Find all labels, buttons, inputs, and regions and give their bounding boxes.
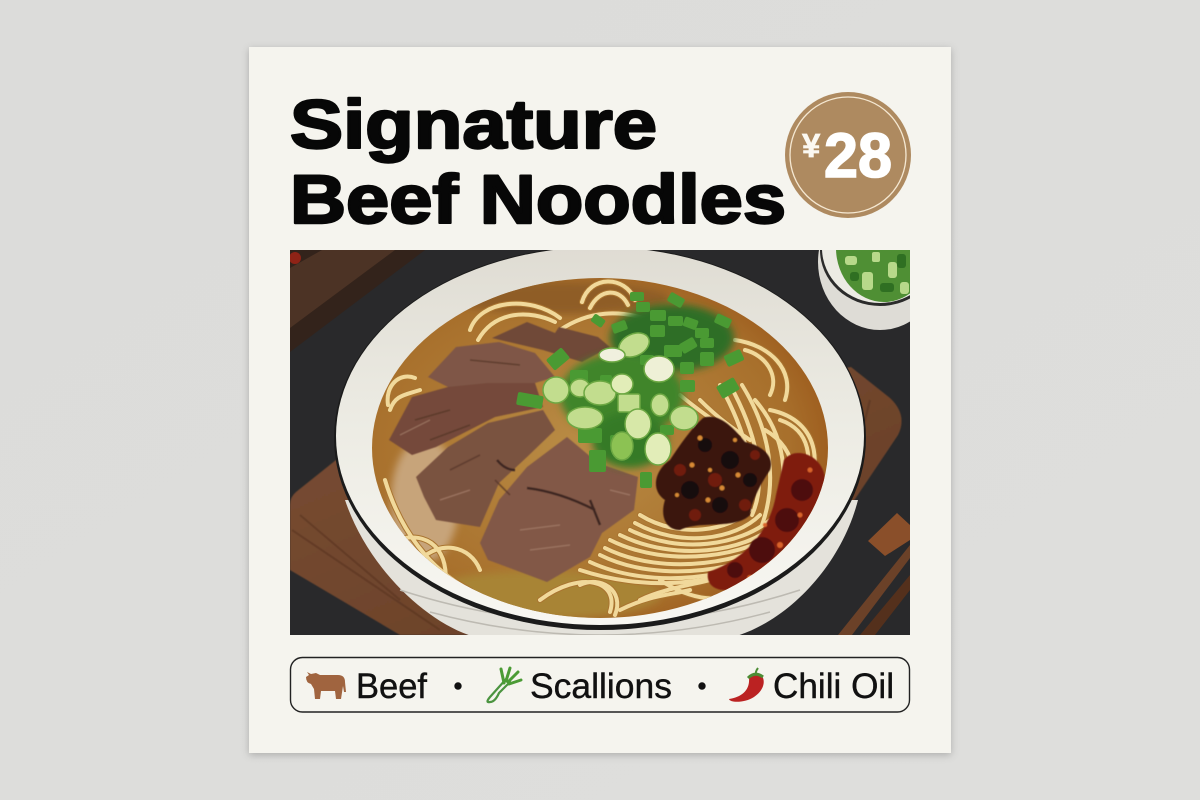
separator dot [698,682,706,690]
title: Beef Noodles [290,161,786,238]
icon: scallion [488,668,521,702]
food photo: beef noodle bowl [290,250,910,635]
wooden board [290,367,902,635]
icon: cow [306,672,346,699]
broth and noodles [378,281,825,619]
panel: menu card [249,47,951,753]
label: scallions: Scallions [530,667,672,706]
price badge [785,92,911,218]
label: chili oil: Chili Oil [773,667,894,706]
separator dot [454,682,462,690]
title [290,86,786,238]
price badge: ¥ [802,127,821,164]
wooden tray top left [289,250,425,352]
noodle bowl [334,246,866,640]
side bowl of scallions [818,250,910,330]
ingredients bar [290,658,910,712]
label: beef: Beef [356,667,427,706]
price badge: 28 [824,121,892,191]
chili oil [708,453,825,590]
chopsticks and rest [838,513,910,635]
sliced scallions [516,292,745,488]
beef slices [389,322,638,582]
title: Signature [290,86,657,163]
chili crisp [656,417,771,530]
icon: chili pepper [729,668,764,702]
